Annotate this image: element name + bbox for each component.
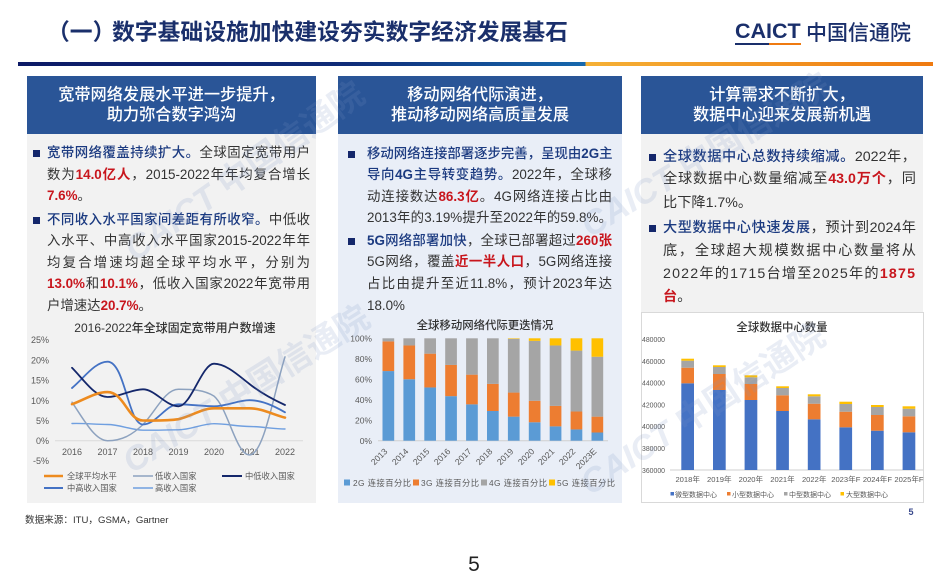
watermarks: CAICT 中国信通院 [575, 66, 837, 245]
stacked bar chart: mobile generations: 2G 连接百分比 [353, 478, 411, 488]
text block: mobile networks: 2013年的3.19%提升至2022年的59.8%。 [367, 210, 612, 225]
stacked bar chart: mobile generations: 60% [355, 374, 372, 384]
stacked bar chart: mobile generations: 80% [355, 354, 372, 364]
chart card: data centers background [641, 312, 924, 503]
stacked bar chart: data center count: 2022年 [802, 474, 827, 484]
text block: broadband: 数为14.0亿人，2015-2022年年均复合增长 [47, 167, 310, 182]
line chart: fixed broadband growth: 2018 [133, 447, 153, 457]
stacked bar chart: data center count: 420000 [642, 402, 665, 410]
line chart: fixed broadband growth: 10% [31, 396, 49, 406]
text block: mobile networks: 导向4G主导转变趋势。2022年，全球移 [367, 167, 612, 182]
stacked bar chart: mobile generations: 2013 [369, 446, 390, 467]
text block: broadband: 7.6%。 [47, 188, 91, 203]
line chart: fixed broadband growth: 2016-2022年全球固定宽带用户数增速 [74, 320, 276, 335]
title: （一） [47, 19, 115, 45]
stacked bar chart: mobile generations: 0% [360, 436, 372, 446]
stacked bar chart: data center count: 中型数据中心 [789, 490, 831, 499]
text block: broadband: 13.0%和10.1%，低收入国家2022年宽带用 [47, 276, 310, 291]
line chart: fixed broadband growth: 20% [31, 356, 49, 366]
logo: CAICT [735, 19, 911, 45]
line chart: fixed broadband growth: -5% [33, 456, 49, 466]
heading: broadband [27, 76, 316, 134]
heading: data centers: 数据中心迎来发展新机遇 [693, 106, 871, 124]
line chart: fixed broadband growth: 全球平均水平 [67, 471, 117, 481]
line chart: fixed broadband growth: 0% [36, 436, 49, 446]
watermarks: CAICT 中国信通院 [574, 317, 832, 503]
heading: broadband: 宽带网络发展水平进一步提升， [58, 86, 285, 104]
stacked bar chart: mobile generations: 2014 [390, 446, 411, 467]
stacked bar chart: data center count: 小型数据中心 [732, 490, 774, 499]
stacked bar chart: mobile generations: 2022 [557, 446, 578, 467]
heading: broadband: 助力弥合数字鸿沟 [107, 106, 236, 124]
slide page number: 5 [908, 507, 914, 517]
text block: mobile networks: 5G网络，覆盖近一半人口，5G网络连接 [367, 254, 612, 269]
text block: data centers: 底，全球超大规模数据中心数量将从 [663, 243, 916, 259]
line chart: fixed broadband growth: 25% [31, 335, 49, 345]
line chart: fixed broadband growth: 2016 [62, 447, 82, 457]
heading: data centers [641, 76, 923, 134]
text block: mobile networks: 移动网络连接部署逐步完善，呈现由2G主 [367, 146, 613, 161]
heading: mobile networks [338, 76, 622, 134]
stacked bar chart: mobile generations: 2018 [474, 446, 495, 467]
line chart: fixed broadband growth: 中低收入国家 [245, 471, 295, 481]
text block: mobile networks [348, 146, 613, 313]
text block: broadband: 入水平、中高收入水平国家2015-2022年年 [47, 233, 310, 248]
stacked bar chart: mobile generations: 20% [355, 416, 372, 426]
line chart: fixed broadband growth: 5% [36, 416, 49, 426]
stacked bar chart: data center count: 2018年 [675, 474, 700, 484]
text block: data centers: 全球数据中心数量缩减至43.0万个，同 [663, 171, 916, 187]
logo: CAICT: 中国信通院 [806, 22, 911, 45]
stacked bar chart: data center count: 大型数据中心 [846, 490, 888, 499]
heading: mobile networks: 推动移动网络高质量发展 [391, 106, 569, 124]
data source: 数据来源：ITU，GSMA，Gartner [25, 515, 168, 526]
line chart: fixed broadband growth: 低收入国家 [155, 471, 197, 481]
stacked bar chart: data center count: 2020年 [739, 474, 764, 484]
stacked bar chart: mobile generations: 4G 连接百分比 [489, 478, 547, 488]
watermarks: CAICT 中国信通院 [118, 75, 372, 269]
stacked bar chart: mobile generations: 5G 连接百分比 [557, 478, 615, 488]
stacked bar chart: data center count: 460000 [642, 359, 665, 366]
text block: broadband: 不同收入水平国家间差距有所收窄。中低收 [47, 212, 310, 227]
stacked bar chart: mobile generations: 2017 [453, 446, 474, 467]
stacked bar chart: mobile generations [344, 318, 615, 488]
stacked bar chart: data center count: 全球数据中心数量 [736, 320, 828, 334]
heading: mobile networks: 移动网络代际演进， [407, 86, 553, 104]
text block: data centers: 比下降1.7%。 [663, 195, 752, 211]
stacked bar chart: data center count: 2019年 [707, 474, 732, 484]
stacked bar chart: data center count: 400000 [642, 424, 665, 431]
text block: broadband [33, 145, 310, 313]
heading: data centers: 计算需求不断扩大， [709, 86, 855, 104]
stacked bar chart: mobile generations: 40% [355, 395, 372, 405]
stacked bar chart: data center count [642, 320, 924, 499]
watermarks: CAICT 中国信通院 [116, 298, 377, 481]
text block: mobile networks: 动连接数达86.3亿。4G网络连接占比由 [367, 189, 612, 204]
line chart: fixed broadband growth: 2020 [204, 447, 224, 457]
line chart: fixed broadband growth: 15% [31, 376, 49, 386]
stacked bar chart: data center count: 360000 [642, 468, 665, 475]
stacked bar chart: mobile generations: 100% [350, 334, 372, 344]
header rule [18, 62, 933, 66]
text block: broadband: 宽带网络覆盖持续扩大。全球固定宽带用户 [47, 145, 310, 160]
page number: 5 [468, 553, 480, 576]
panel: broadband [27, 76, 316, 503]
line chart: fixed broadband growth: 2022 [275, 447, 295, 457]
text block: mobile networks: 5G网络部署加快，全球已部署超过260张 [367, 233, 612, 248]
text block: data centers: 台。 [663, 289, 691, 305]
stacked bar chart: mobile generations: 2020 [516, 446, 537, 467]
text block: data centers: 2022年的1715台增至2025年的1875 [663, 266, 916, 282]
line chart: fixed broadband growth [31, 320, 303, 493]
stacked bar chart: mobile generations: 2016 [432, 446, 453, 467]
stacked bar chart: mobile generations: 2015 [411, 446, 432, 467]
text block: mobile networks: 18.0% [367, 298, 405, 313]
line chart: fixed broadband growth: 中高收入国家 [67, 483, 117, 493]
panel: mobile networks [338, 76, 622, 503]
stacked bar chart: data center count: 2021年 [770, 474, 795, 484]
stacked bar chart: data center count: 微型数据中心 [675, 490, 717, 499]
logo: CAICT: CAICT [735, 19, 801, 43]
title: 数字基础设施加快建设夯实数字经济发展基石 [112, 19, 568, 45]
stacked bar chart: mobile generations: 2019 [495, 446, 516, 467]
stacked bar chart: mobile generations: 2023E [574, 446, 599, 471]
text block: data centers [649, 148, 916, 305]
stacked bar chart: mobile generations: 2021 [536, 446, 557, 467]
text block: broadband: 均复合增速均超全球平均水平，分别为 [47, 255, 310, 270]
stacked bar chart: data center count: 440000 [642, 380, 665, 388]
panel: data centers [641, 76, 923, 503]
stacked bar chart: data center count: 480000 [642, 337, 665, 344]
stacked bar chart: data center count: 380000 [642, 446, 665, 453]
stacked bar chart: mobile generations: 全球移动网络代际更迭情况 [417, 318, 554, 332]
line chart: fixed broadband growth: 2017 [97, 447, 118, 457]
text block: broadband: 户增速达20.7%。 [47, 298, 152, 313]
text block: data centers: 大型数据中心快速发展，预计到2024年 [663, 220, 916, 236]
stacked bar chart: data center count: 2024年F [863, 474, 892, 484]
text block: data centers: 全球数据中心总数持续缩减。2022年， [663, 149, 916, 165]
stacked bar chart: data center count: 2025年F [894, 474, 924, 484]
stacked bar chart: mobile generations: 3G 连接百分比 [421, 478, 479, 488]
line chart: fixed broadband growth: 2021 [239, 447, 260, 457]
stacked bar chart: data center count: 2023年F [831, 474, 861, 484]
line chart: fixed broadband growth: 高收入国家 [155, 483, 197, 493]
line chart: fixed broadband growth: 2019 [168, 447, 189, 457]
text block: mobile networks: 占比由提升至近11.8%，预计2023年达 [367, 276, 612, 291]
